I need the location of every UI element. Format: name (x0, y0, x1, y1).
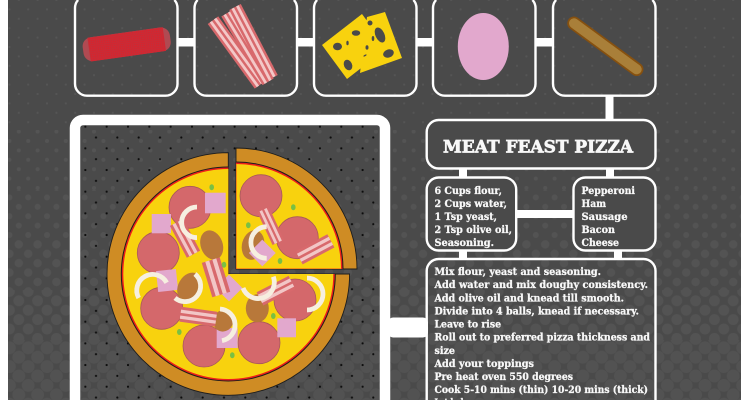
toppings on main pizza (137, 184, 323, 367)
icon: sausage (574, 23, 637, 69)
method steps: Add water and mix doughy consistency. (434, 280, 648, 291)
pizza cut slice (236, 148, 357, 269)
base ingredients list: 1 Tsp yeast, (434, 212, 497, 223)
toppings on slice (238, 175, 334, 266)
method steps: size (434, 346, 455, 357)
pepperoni ingredient box (75, 0, 178, 96)
icon: cheese slices (322, 12, 402, 79)
toppings list: Ham (582, 199, 606, 210)
method steps: Roll out to preferred pizza thickness and (434, 333, 650, 344)
base ingredients list: Seasoning. (434, 238, 494, 249)
heading: MEAT FEAST PIZZA (443, 138, 634, 158)
base ingredients box (427, 178, 516, 250)
method steps (434, 267, 650, 400)
toppings list: Sausage (582, 212, 628, 223)
icon: pepperoni stick (81, 26, 172, 62)
ham ingredient box (433, 0, 536, 96)
base ingredients list: 6 Cups flour, (434, 186, 502, 197)
method box (427, 259, 656, 400)
toppings list: Cheese (582, 238, 619, 249)
base ingredients list (434, 186, 512, 249)
method steps: Mix flour, yeast and seasoning. (434, 267, 601, 278)
toppings list (582, 186, 635, 249)
bacon ingredient box (194, 0, 297, 96)
method steps: Divide into 4 balls, knead if necessary. (434, 306, 639, 318)
cheese ingredient box (314, 0, 416, 96)
panel: pizza frame (75, 120, 385, 400)
icon: bacon rashers (208, 4, 278, 89)
method steps: Cook 5-10 mins (thin) 10-20 mins (thick) (434, 385, 648, 396)
connectors between boxes (177, 38, 622, 338)
toppings list: Bacon (582, 225, 616, 236)
base ingredients list: 2 Cups water, (434, 199, 507, 210)
icon: ham slice (458, 13, 509, 80)
title box (427, 120, 656, 168)
method steps: Leave to rise (434, 320, 501, 331)
toppings box (574, 178, 656, 250)
toppings list: Pepperoni (582, 186, 635, 197)
sausage ingredient box (553, 0, 656, 96)
method steps: Pre heat oven 550 degrees (434, 372, 573, 383)
pizza main body with quarter removed (107, 153, 350, 395)
base ingredients list: 2 Tsp olive oil, (434, 225, 512, 236)
method steps: Add olive oil and knead till smooth. (434, 293, 624, 304)
method steps: Add your toppings (434, 359, 534, 370)
